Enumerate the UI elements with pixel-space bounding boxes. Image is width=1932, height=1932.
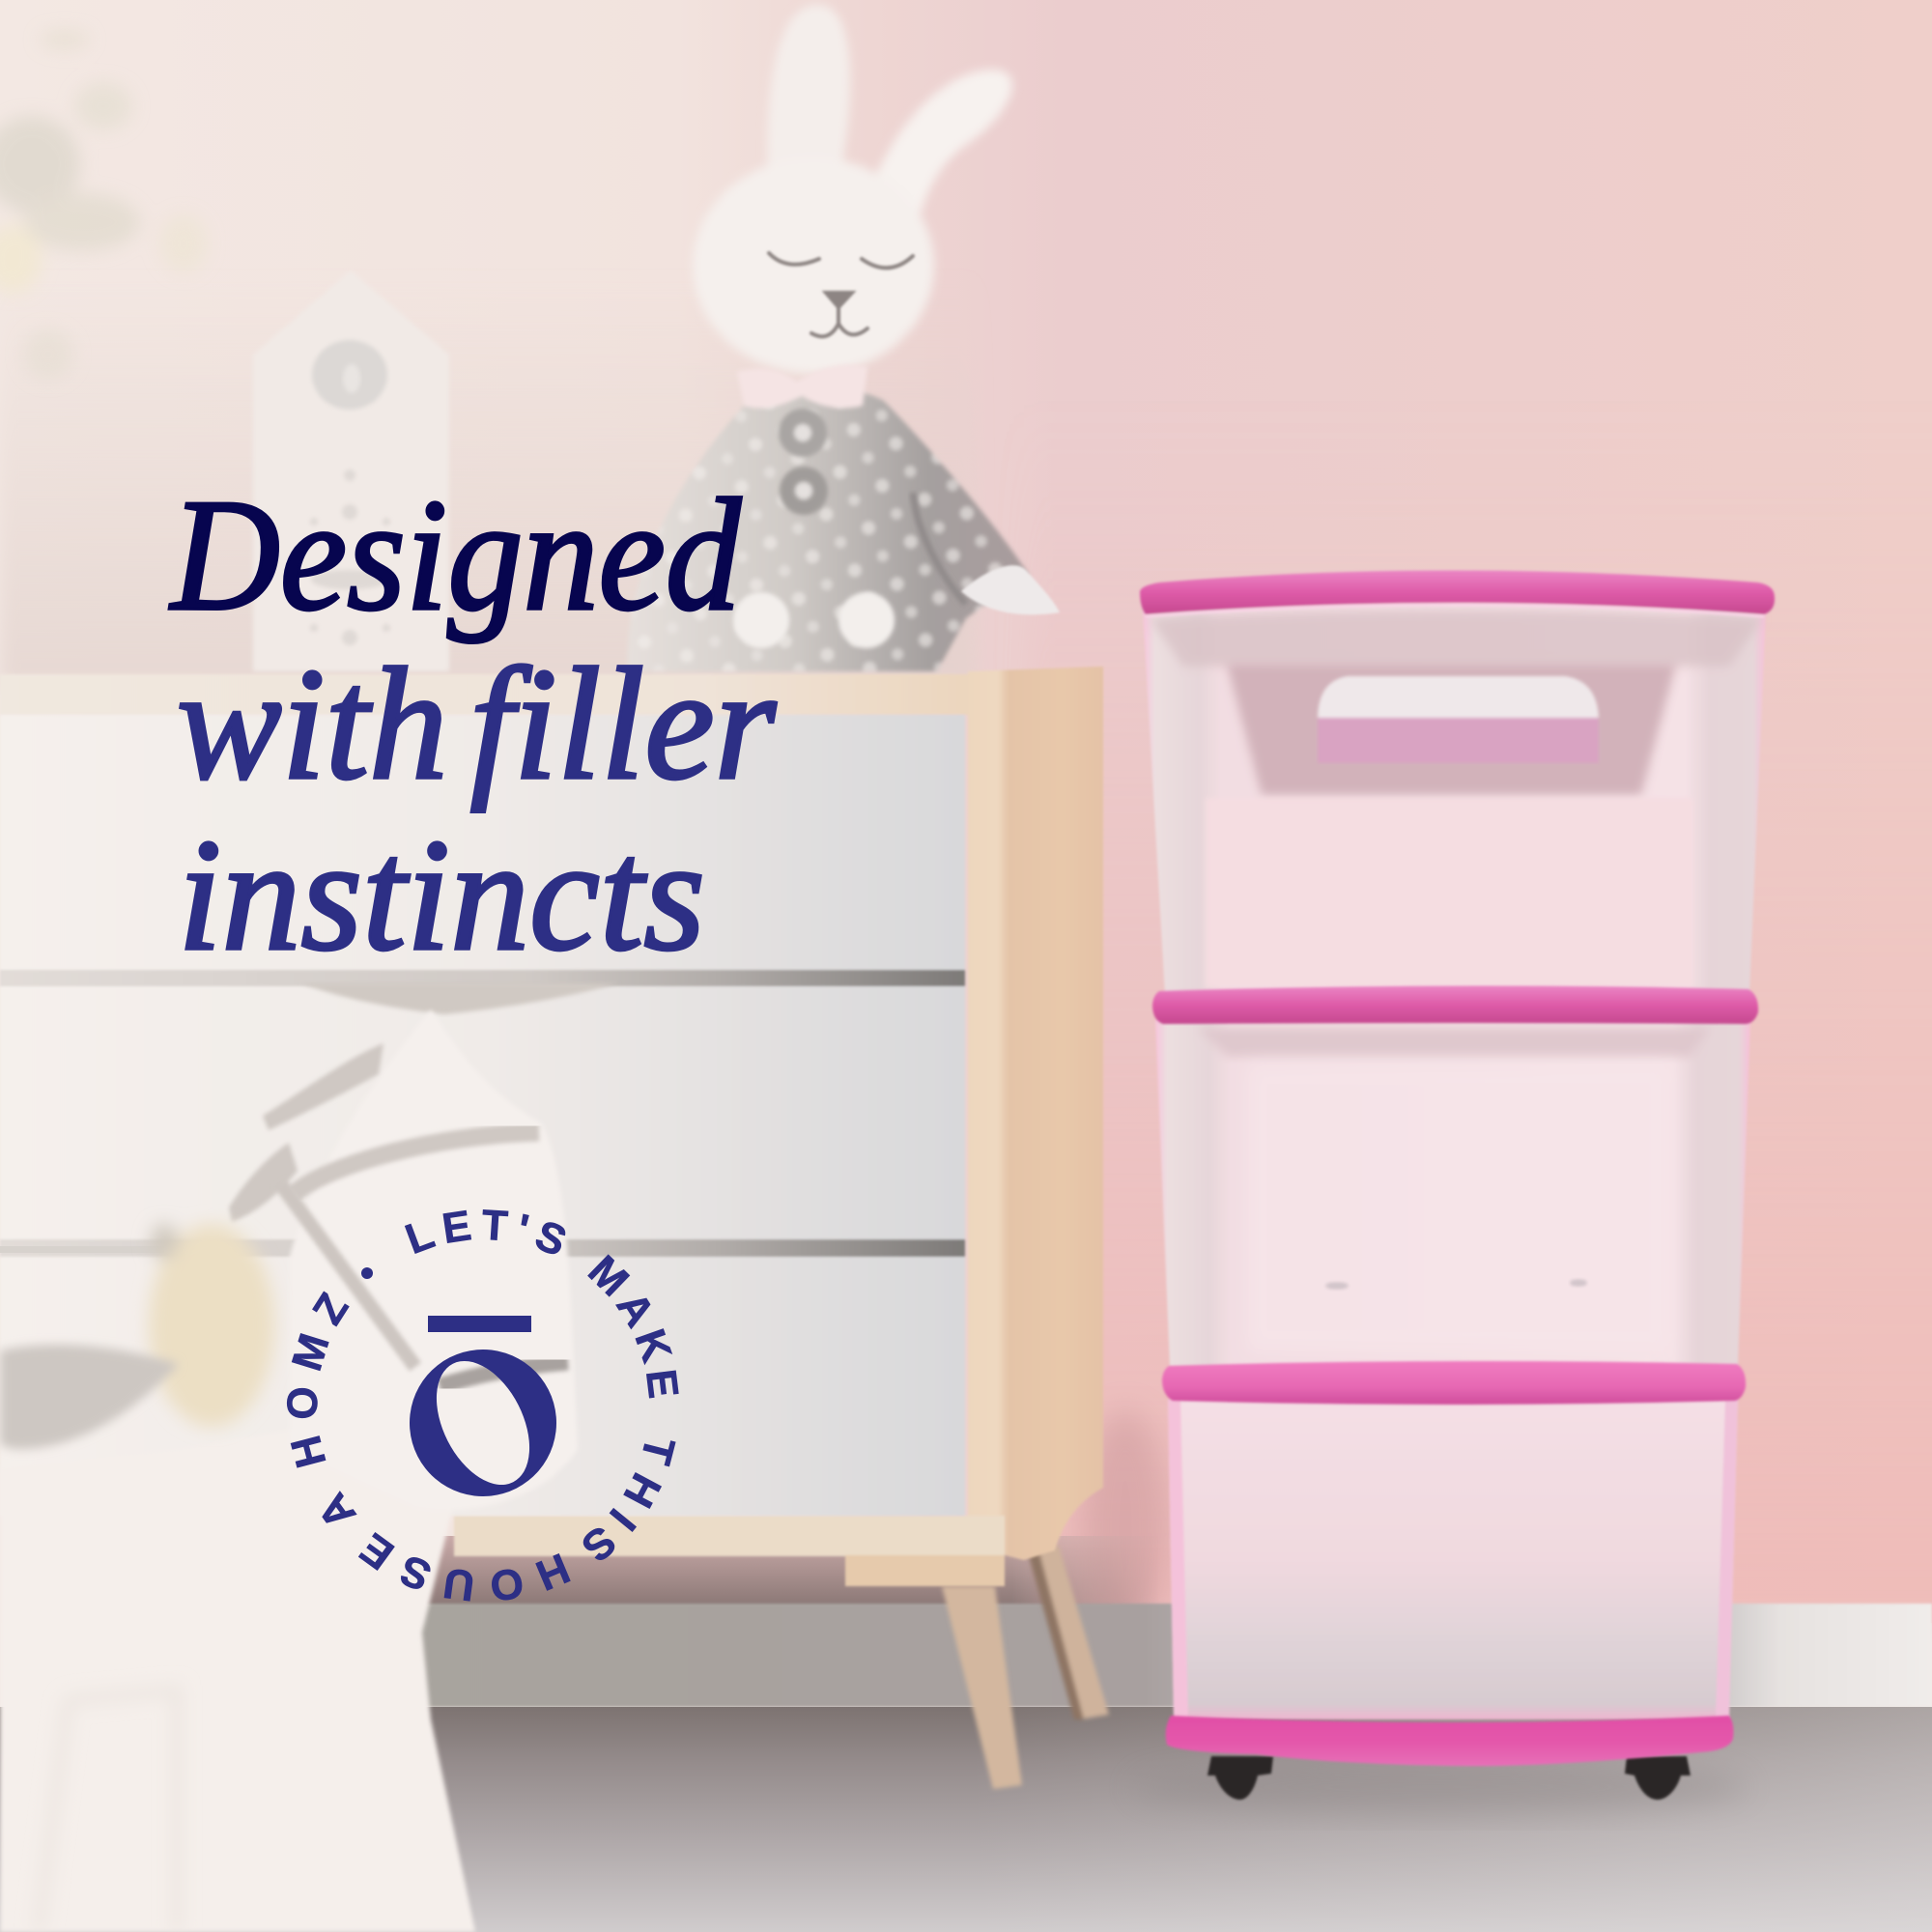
badge ring text: MAKE xyxy=(587,1254,679,1399)
clock marks xyxy=(310,469,390,645)
floor shadow of drawer unit xyxy=(1130,1760,1748,1814)
middle drawer inner panel xyxy=(1246,1063,1671,1352)
bunny dress and arm xyxy=(628,387,1029,671)
bunny bow xyxy=(737,365,867,408)
horse cheek strap xyxy=(280,1183,415,1367)
headline xyxy=(169,466,777,983)
logo macron bar xyxy=(428,1316,531,1332)
shadow on wall beside dresser xyxy=(1082,1410,1169,1642)
logo letter O xyxy=(384,1324,582,1521)
dresser top and side frame xyxy=(0,667,1103,1586)
bunny paw xyxy=(961,565,1060,614)
horse leg outlines xyxy=(39,1690,177,1932)
badge ring text: LET'S xyxy=(404,1209,566,1254)
lower divider rim xyxy=(1162,1361,1746,1405)
background: left wall dimming xyxy=(0,0,976,686)
plastic three-drawer storage unit xyxy=(1140,570,1775,1800)
background: floor xyxy=(0,1707,1932,1932)
background: right wall salmon tint xyxy=(1024,0,1932,1623)
horse mane tufts xyxy=(229,1043,384,1222)
middle drawer clips xyxy=(1325,1282,1349,1290)
middle drawer back band xyxy=(1198,1028,1710,1057)
horse mouth strap xyxy=(440,1362,568,1386)
grey toy arm xyxy=(0,1345,179,1449)
bunny arm seam xyxy=(913,493,966,604)
background: floor lightening on right xyxy=(966,1707,1932,1932)
bunny buttons xyxy=(779,409,828,515)
wheels xyxy=(1208,1756,1690,1800)
top drawer front panel shading xyxy=(1227,664,1676,795)
badge ring text: HOUSE xyxy=(357,1532,571,1602)
headline line 2: with filler xyxy=(177,635,777,812)
badge ring text: THIS xyxy=(583,1440,676,1560)
house-shaped clock xyxy=(253,270,449,671)
top drawer xyxy=(1143,603,1766,995)
yellow toy xyxy=(149,1224,274,1427)
clock dial xyxy=(312,340,387,410)
headline line 1: Designed xyxy=(169,466,742,643)
horse bridle strap xyxy=(294,1132,539,1194)
base rim xyxy=(1166,1716,1733,1766)
upper divider rim xyxy=(1152,985,1758,1024)
top drawer handle xyxy=(1318,676,1599,763)
background: baseboard xyxy=(415,1604,1932,1707)
dresser drawer fronts xyxy=(0,715,965,1516)
middle drawer xyxy=(1155,1019,1750,1367)
clock hole xyxy=(343,364,360,393)
badge ring text: HOMZ xyxy=(286,1291,350,1468)
badge ring text xyxy=(286,1209,679,1602)
badge ring text: A xyxy=(322,1491,357,1523)
rocking horse toy xyxy=(0,983,618,1932)
top lid rim xyxy=(1140,570,1775,616)
flower decoration xyxy=(0,30,208,380)
horse body xyxy=(0,1009,578,1932)
headline line 3: instincts xyxy=(178,806,705,983)
plush bunny xyxy=(628,5,1060,671)
clock body xyxy=(253,270,449,671)
dresser legs xyxy=(942,1546,1109,1789)
circular brand badge xyxy=(286,1209,679,1602)
bunny feet xyxy=(733,592,895,648)
drawer gap line near toy xyxy=(0,1246,164,1253)
wooden dresser xyxy=(0,667,1109,1789)
arc under top drawer xyxy=(301,983,618,1014)
badge dot xyxy=(361,1267,373,1279)
bunny face xyxy=(769,253,913,336)
right wheel xyxy=(1625,1756,1690,1800)
top drawer back band xyxy=(1150,610,1763,667)
left wheel xyxy=(1208,1756,1273,1800)
top drawer inner window xyxy=(1206,798,1693,987)
bottom drawer xyxy=(1168,1399,1738,1719)
bunny ears and head xyxy=(693,5,1012,374)
shadow on wall under dresser xyxy=(425,1536,1159,1605)
